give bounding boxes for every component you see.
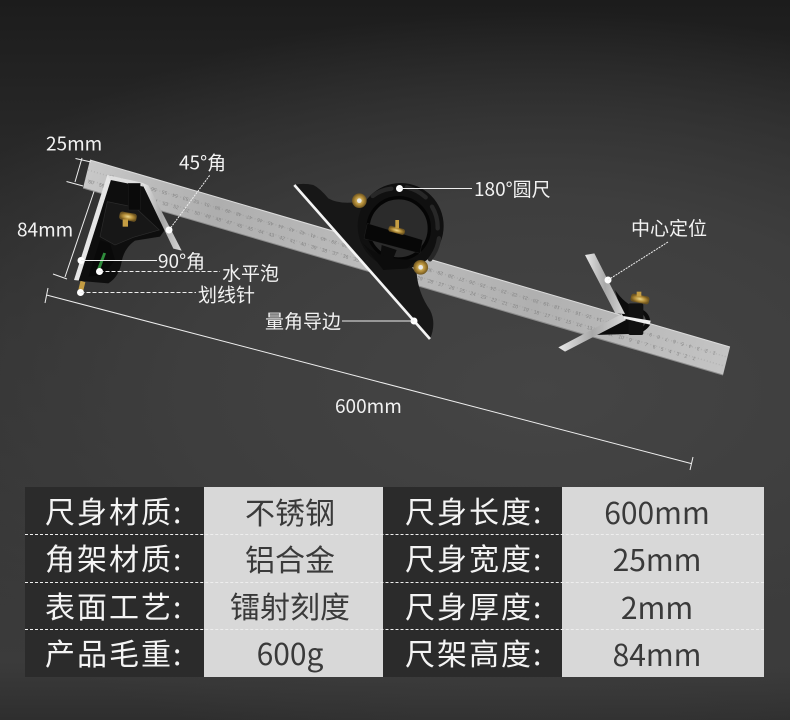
pointer bar <box>364 223 423 253</box>
specification table <box>25 487 764 677</box>
84mm dimension: 84mm <box>17 216 73 242</box>
row 1: 尺身长度: <box>405 488 543 532</box>
callout: 180 degree protractor: 180°圆尺 <box>474 175 551 202</box>
callout: 90 degree angle: 90°角 <box>158 247 205 274</box>
row 2: 铝合金 <box>245 536 335 580</box>
callout: spirit level: 水平泡 <box>222 259 279 286</box>
ruler scale numbers: 60 59 58 57 56 55 54 53 52 51 50 49 48 47 46 45 44 43 42 41 40 39 38 37 36 35 34 33 32 31 30 29 28 27 26 25 24 23 22 21 20 19 18 17 16 15 14 13 12 11 10 9 8 7 6 5 4 3 2 1 <box>87 179 696 362</box>
row 3: 表面工艺: <box>45 583 183 627</box>
row 4: 84mm <box>613 631 701 675</box>
callout: 180 degree protractor <box>396 175 551 202</box>
row 3: 镭射刻度 <box>230 583 350 627</box>
callout: 45 degree angle <box>166 148 226 234</box>
callout: spirit level <box>96 259 279 286</box>
90 degree silver edge <box>74 175 112 281</box>
25mm dimension: 25mm <box>46 130 102 156</box>
row 2: 角架材质: <box>45 535 183 579</box>
brass knob <box>630 293 650 305</box>
600mm dimension <box>45 288 693 470</box>
row 4: 尺架高度: <box>405 630 543 674</box>
brass screw on bar <box>388 225 405 235</box>
upper arm <box>585 253 625 314</box>
callout: 45 degree angle: 45°角 <box>179 148 226 176</box>
ruler blade <box>83 160 730 375</box>
callout: angle guide edge: 量角导边 <box>265 307 341 334</box>
600mm dimension: 600mm <box>335 392 402 419</box>
callout: angle guide edge <box>265 307 418 334</box>
row 4: 产品毛重: <box>45 630 183 674</box>
clamp cylinder <box>128 183 140 210</box>
lower arm <box>558 314 626 352</box>
center protractor head <box>294 183 444 339</box>
row 2 <box>45 535 701 580</box>
right arm <box>623 316 651 325</box>
callout: scriber: 划线针 <box>198 280 255 308</box>
spirit level <box>88 240 115 277</box>
row 3: 尺身厚度: <box>405 583 543 627</box>
row 3 <box>45 583 693 628</box>
brass nut <box>119 211 137 222</box>
row 1: 不锈钢 <box>245 489 335 533</box>
row 3: 2mm <box>621 584 693 628</box>
callout: center finder <box>604 214 707 284</box>
black body <box>77 177 167 283</box>
left square head <box>74 175 182 291</box>
guide white edge <box>294 185 430 339</box>
ruler scale numbers: 1 2 3 4 5 6 7 8 9 10 11 12 13 14 15 16 17 18 19 20 21 22 23 24 25 26 27 28 29 30 31 32 33 34 35 36 37 38 39 40 41 42 43 44 45 46 47 48 49 50 51 52 53 54 55 56 57 58 59 60 <box>108 173 717 356</box>
scriber pin <box>78 281 85 291</box>
upper brass screw <box>352 193 367 208</box>
row 2: 25mm <box>613 536 701 580</box>
45 degree silver edge <box>142 183 182 251</box>
callout: 90 degree angle <box>78 247 205 274</box>
row 1: 尺身材质: <box>45 488 183 532</box>
callout: center finder: 中心定位 <box>631 214 707 241</box>
black clamp loop <box>595 290 650 335</box>
row 4 <box>45 630 701 675</box>
protractor body <box>294 184 433 339</box>
row 1: 600mm <box>604 489 710 533</box>
25mm dimension <box>46 130 102 186</box>
protractor ring <box>358 183 444 269</box>
lower brass screw <box>413 260 428 275</box>
row 4: 600g <box>257 630 323 674</box>
84mm dimension <box>17 192 94 279</box>
callout: scriber <box>77 280 255 308</box>
center finder head <box>558 253 651 352</box>
row 1 <box>45 488 710 533</box>
row 2: 尺身宽度: <box>405 535 543 579</box>
